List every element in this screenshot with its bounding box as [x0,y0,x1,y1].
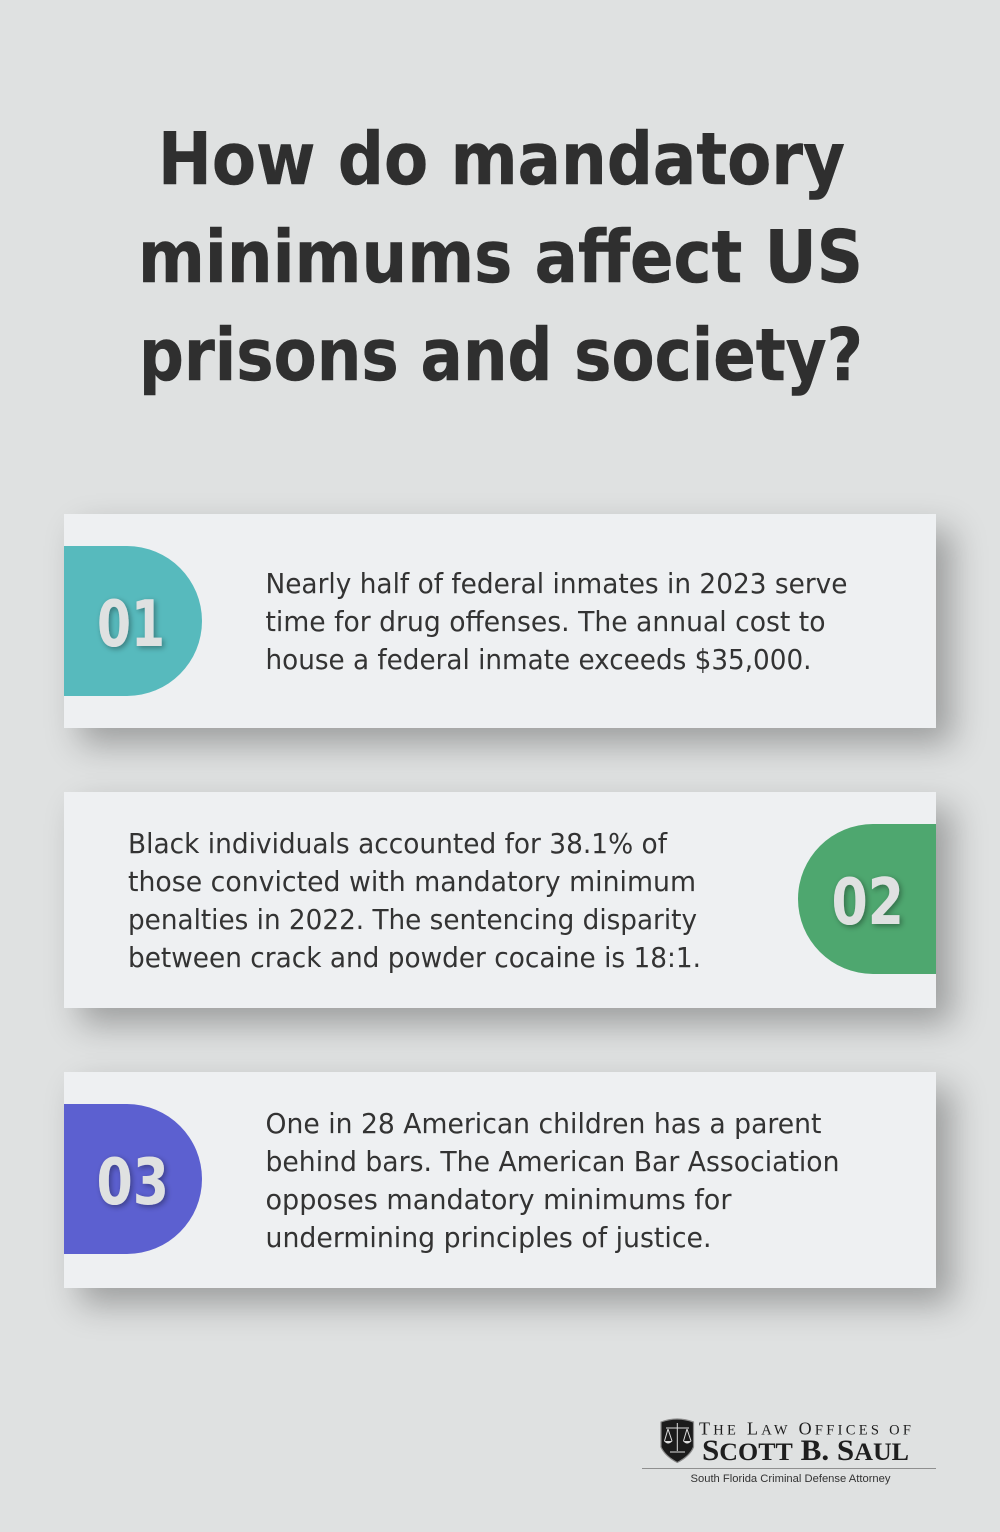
badge 02 [798,824,936,974]
logo name: THE LAW OFFICES OF [699,1418,911,1438]
text block 2: those convicted with mandatory minimum [128,865,696,898]
text block 1 [266,567,848,676]
title [138,117,863,397]
badge 01 [64,546,202,696]
badge 01: 01 [97,588,165,662]
text block 3: opposes mandatory minimums for [266,1183,732,1216]
text block 1: time for drug offenses. The annual cost to [266,605,826,638]
text block 2: between crack and powder cocaine is 18:1. [128,941,701,974]
panel: card 1 [64,514,936,728]
text block 3 [266,1107,840,1254]
text block 2: Black individuals accounted for 38.1% of [128,827,668,860]
title: minimums affect US [138,215,863,299]
text block 1: house a federal inmate exceeds $35,000. [266,643,812,676]
title: How do mandatory [158,117,845,201]
text block 2: penalties in 2022. The sentencing disparity [128,903,697,936]
title: prisons and society? [139,313,863,397]
text block 3: behind bars. The American Bar Association [266,1145,840,1178]
badge 03: 03 [96,1146,169,1220]
icon: shield with scales [661,1419,694,1462]
badge 02: 02 [832,866,904,940]
logo name: SCOTT B. SAUL [702,1434,909,1467]
logo name [699,1418,911,1467]
panel: card 3 [64,1072,936,1288]
text block 3: undermining principles of justice. [266,1221,712,1254]
text block 2 [128,827,701,974]
logo [642,1418,936,1485]
text block 1: Nearly half of federal inmates in 2023 serve [266,567,848,600]
badge 03 [64,1104,202,1254]
logo tagline: South Florida Criminal Defense Attorney [690,1473,891,1485]
text block 3: One in 28 American children has a parent [266,1107,822,1140]
panel: card 2 [64,792,936,1008]
